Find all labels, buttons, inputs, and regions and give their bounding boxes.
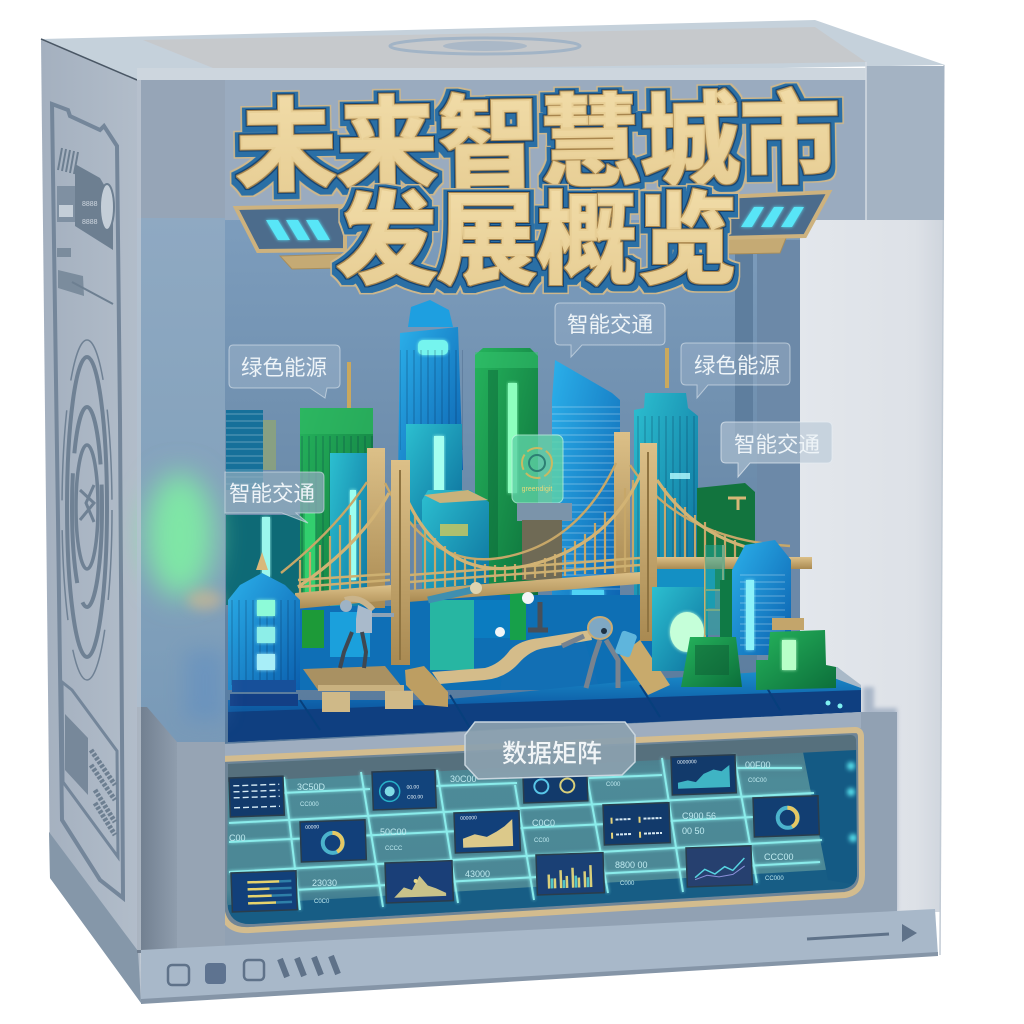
green teal city mid block <box>652 545 734 671</box>
data cell labels: C0C0 <box>532 818 555 828</box>
callout: green energy right: 绿色能源 <box>694 349 780 380</box>
clear glass: right side pale column <box>800 65 944 955</box>
data cell labels: C000 <box>606 782 621 788</box>
mini panel: bars list <box>231 871 297 912</box>
building: right stepped blue tower with spire <box>634 348 698 600</box>
blurred blue city base through glass <box>185 650 225 720</box>
elevated walkway and gold plinths <box>303 630 670 712</box>
callout: smart traffic top <box>555 303 665 357</box>
control button outline <box>168 965 189 985</box>
etched device panel: 8888 <box>82 201 98 208</box>
mini panel: gauge <box>372 770 436 810</box>
building: grey podium <box>517 503 572 580</box>
building: centre teal block with rooftop grid <box>422 490 489 589</box>
data cell labels: C0C0 <box>314 899 330 905</box>
mini panel: yellow area chart: 000000 <box>460 815 477 822</box>
mini panel: list <box>603 803 670 845</box>
base seen through frosted glass <box>137 707 177 953</box>
frosted glass: top right block <box>866 62 944 220</box>
callout: smart traffic right <box>721 422 832 477</box>
building: teal tower lower section <box>406 424 462 524</box>
mini panel: area chart teal <box>671 755 736 795</box>
miniature city <box>226 300 861 742</box>
lantern tower front left <box>228 552 300 706</box>
interior back wall <box>224 215 800 760</box>
mini panel: gauge: 00.00 <box>406 784 419 791</box>
callout: smart traffic top: 智能交通 <box>567 308 653 339</box>
mini panel: line chart <box>686 846 752 887</box>
building: far left teal block <box>226 410 276 490</box>
base block under display <box>224 712 897 960</box>
callout: smart traffic left: 智能交通 <box>229 477 315 508</box>
label: data matrix: 数据矩阵 <box>502 734 602 770</box>
box: top face <box>42 20 945 80</box>
mini panel: table <box>229 776 284 817</box>
data cell labels: CCCC <box>385 846 403 852</box>
robot: big front robot <box>562 617 638 688</box>
progress arrow <box>807 934 889 939</box>
data cell labels: 30C00 <box>450 774 477 784</box>
building: dark green right block <box>697 483 755 590</box>
control button outline 2 <box>244 960 264 980</box>
data cell labels: 8800 00 <box>615 860 648 870</box>
callout: green energy left <box>229 345 340 398</box>
label: data matrix <box>465 722 635 779</box>
mini panel: mountain chart <box>385 861 453 903</box>
title wing right <box>722 192 829 254</box>
display gold frame <box>221 730 862 930</box>
bridge hangers <box>300 480 735 600</box>
hologram screen emblem: greendigit <box>522 486 552 493</box>
display screen and grid <box>224 730 864 930</box>
robot: left walker <box>340 599 394 668</box>
mini panel: yellow area chart <box>454 811 520 853</box>
bridge rear tower <box>367 432 630 608</box>
mini panel: gauge: C00.00 <box>407 794 423 801</box>
right tall blue tower <box>732 540 791 655</box>
building: central green tower <box>475 348 538 600</box>
bridge decks and rails <box>295 557 812 609</box>
building: slanted blue tower <box>552 360 620 595</box>
etched lower spec plate <box>62 682 118 857</box>
bridge front cables <box>298 473 746 587</box>
title line two: 发展概览 <box>337 159 737 304</box>
title line one: 未来智慧城市 <box>235 58 841 211</box>
data cell labels <box>229 760 794 905</box>
data cell labels: C900 56 <box>682 811 716 821</box>
mini panel: area chart teal: 0000000 <box>677 759 697 766</box>
building: tall blue skyscraper <box>398 300 463 480</box>
data cell labels: C00 <box>229 833 246 843</box>
control button filled <box>205 963 226 984</box>
data cell labels: 23030 <box>312 878 337 888</box>
green blur glow <box>146 473 214 597</box>
suspension bridge <box>281 432 812 665</box>
data cell labels: 00F00 <box>745 760 771 770</box>
grid lines <box>229 755 822 910</box>
display right dark bay <box>803 745 857 885</box>
data cell labels: 43000 <box>465 869 490 879</box>
data cell labels: 3C50D <box>297 782 326 792</box>
mini panel: donut <box>300 820 366 862</box>
data matrix display <box>221 730 864 930</box>
data cell labels: CC000 <box>300 802 319 808</box>
box: left face with etched panels <box>41 39 141 1003</box>
callout: green energy right <box>681 343 790 398</box>
callout: smart traffic left <box>225 472 324 523</box>
data cell labels: CC000 <box>765 876 784 882</box>
etched device panel <box>57 148 114 304</box>
data cell labels: C0C00 <box>748 778 767 784</box>
etched concentric rings emblem <box>62 340 112 680</box>
bridge front towers <box>391 443 657 665</box>
data cell labels: C000 <box>620 881 635 887</box>
mini panel: twin dials <box>523 775 588 803</box>
glass platform <box>228 667 861 742</box>
hologram screen emblem <box>512 435 563 503</box>
callout: green energy left: 绿色能源 <box>241 351 327 382</box>
bridge rear cables <box>281 463 790 573</box>
etched frame outline <box>52 104 123 898</box>
frosted glass: left column <box>137 80 225 953</box>
mini panel: donut: 00000 <box>305 824 319 831</box>
bottom tray with control icons <box>141 909 938 1004</box>
green blocks front right <box>681 618 836 690</box>
frosted glass: top band <box>137 68 866 220</box>
callout: smart traffic right: 智能交通 <box>734 428 820 459</box>
slash marks <box>280 956 338 977</box>
building: green tower with spire <box>300 362 373 606</box>
title wing left <box>236 206 345 269</box>
data cell labels: 00 50 <box>682 826 705 836</box>
mini panel: bar chart <box>536 853 604 895</box>
street-level glass blocks <box>296 568 715 690</box>
robot: crane on walkway <box>428 582 548 637</box>
data cell labels: CCC00 <box>764 852 794 862</box>
play triangle <box>902 924 917 942</box>
building: teal mid-left tower behind bridge <box>226 453 367 606</box>
mini panel: donut right <box>753 796 819 837</box>
etched device panel: 8888 <box>82 219 98 226</box>
data cell labels: 50C00 <box>380 827 407 837</box>
amber blur glow <box>187 590 223 610</box>
data cell labels: CC00 <box>534 838 550 844</box>
